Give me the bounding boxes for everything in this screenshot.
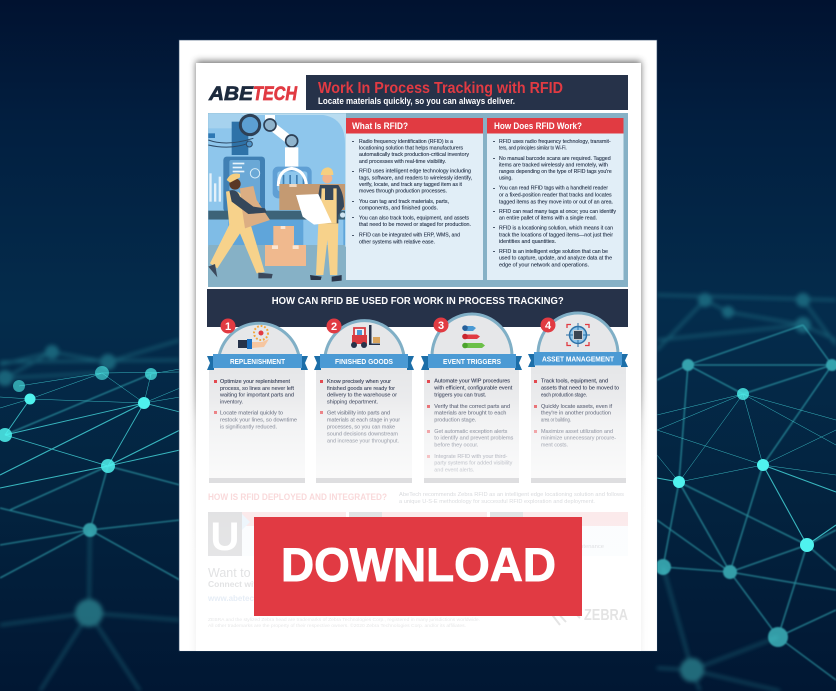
card 4 bullets: Quickly locate assets, even if — [541, 404, 612, 410]
network graphic: left side — [0, 340, 180, 691]
bullet list: what is RFID: automatically track production-critical inventory — [359, 152, 469, 158]
fade overlay — [180, 370, 657, 651]
card 1: replenishment — [207, 318, 308, 483]
card 1 bullets: is significantly reduced. — [220, 425, 277, 431]
illustration: factory workers and robot arm — [208, 113, 348, 288]
card 3 bullets: before they occur. — [434, 443, 479, 449]
card 3 bullets: Integrate RFID with your third- — [434, 454, 507, 460]
number badge 3: 3 — [438, 320, 444, 332]
call to action — [207, 566, 325, 603]
card 2 bullets: sound decisions downstream — [327, 431, 398, 437]
card 2 bullets: processes, so you can make — [327, 425, 395, 431]
bullet list: what is RFID: and processes with real-time visibility. — [359, 159, 446, 165]
bullet list: what is RFID: that need to be moved or staged for production. — [359, 222, 471, 228]
step S — [349, 512, 487, 556]
step U: U — [211, 515, 239, 559]
bullet list: how RFID works: RFID can read many tags at once; you can identify — [499, 209, 616, 215]
outer white card — [179, 40, 657, 651]
inner sheet shadow — [196, 61, 641, 661]
bullet list: how RFID works: ters, and principles similar to Wi-Fi. — [499, 145, 567, 151]
title banner: Work In Process Tracking with RFID — [318, 80, 563, 97]
download button — [254, 517, 582, 616]
card 2 bullets: Know precisely when your — [327, 379, 391, 385]
card 2: finished goods — [314, 318, 414, 483]
worker with blueprint — [296, 167, 344, 282]
ribbon: replenishment — [207, 354, 308, 370]
bullet list: what is RFID: RFID uses intelligent edge technology including — [359, 169, 471, 175]
bullet list: what is RFID: locationing solution that helps manufacturers — [359, 146, 463, 152]
card 2 bullets: delivery to the warehouse or — [327, 393, 397, 399]
call to action: Want to Learn More? — [208, 566, 325, 580]
card 4 bullets: area or building. — [541, 418, 571, 424]
card 2 bullets: materials at each stage in your — [327, 417, 400, 423]
card 3 bullets: with efficient, configurable event — [433, 386, 513, 392]
title banner — [306, 75, 628, 110]
step E — [490, 512, 628, 556]
legal text: ZEBRA and the stylized Zebra head are trademarks of Zebra Technologies Corp., registered in many jurisdictions worldwide. — [208, 617, 480, 623]
ribbon: asset management — [528, 352, 628, 367]
ribbon: asset management: ASSET MANAGEMENT — [542, 354, 615, 364]
section heading band — [207, 289, 628, 327]
legal text — [208, 617, 480, 629]
bullet list: how RFID works: track the locations of tagged items—not just their — [499, 232, 613, 238]
intro text: a unique U-S-E methodology for successful RFID exploration and deployment. — [399, 499, 595, 505]
panel: What Is RFID?: What Is RFID? — [352, 121, 408, 132]
number badge 2 — [326, 318, 342, 334]
bullet list: what is RFID: You can tag and track materials, parts, — [359, 199, 449, 205]
title banner: Locate materials quickly, so you can always deliver. — [318, 96, 515, 107]
icon: hand with gear — [238, 326, 269, 349]
number badge 2: 2 — [331, 321, 337, 333]
bullet list: how RFID works: used to capture, update, and analyze data at the — [499, 256, 612, 262]
network graphic: right side — [655, 294, 836, 691]
boxes — [265, 226, 306, 266]
ribbon: finished goods: FINISHED GOODS — [335, 357, 393, 366]
ribbon: replenishment: REPLENISHMENT — [230, 357, 286, 366]
bullet list: how RFID works: using. — [499, 176, 513, 182]
card 1 bullets: waiting for important parts and — [219, 393, 294, 399]
bullet list: how RFID works: identities and quantities. — [499, 239, 556, 245]
heading: how is RFID deployed: HOW IS RFID DEPLOYED AND INTEGRATED? — [208, 492, 387, 502]
bullet list: how RFID works: or a fixed-position reader that tracks and locates — [499, 193, 612, 199]
logo: AbeTech: TECH — [253, 83, 298, 105]
card 1 bullets: inventory. — [220, 400, 243, 406]
number badge 1: 1 — [225, 321, 231, 333]
card 1 bullets: Optimize your replenishment — [220, 379, 290, 385]
bullet list: how RFID works: items are tracked wirelessly and remotely, with — [499, 163, 608, 169]
deployment section — [207, 492, 628, 629]
bullet list: what is RFID: verify, locate, and track any tagged item as it — [359, 182, 462, 188]
bullet list: how RFID works: RFID uses radio frequency technology, transmit- — [499, 139, 611, 145]
bullet list: what is RFID: other systems with relative ease. — [359, 239, 435, 245]
icon: forklift — [351, 325, 380, 348]
card 4: asset management — [528, 313, 628, 483]
number badge 1 — [220, 318, 236, 334]
card 2 bullets: Get visibility into parts and — [327, 410, 390, 416]
Zebra logo: ZEBRA — [584, 607, 628, 624]
card 1 bullets — [214, 379, 297, 431]
step E: maintenance — [571, 544, 604, 550]
ribbon: event triggers — [421, 354, 522, 370]
icon: status pills — [462, 325, 485, 348]
card 2 bullets: shipping department. — [327, 400, 378, 406]
panel: How Does RFID Work?: How Does RFID Work? — [494, 121, 582, 132]
Zebra logo — [550, 607, 628, 625]
document preview card — [179, 40, 657, 661]
card 3 bullets: Verify that the correct parts and — [434, 404, 510, 410]
card 4 bullets: assets that need to be moved to — [541, 386, 619, 392]
intro text — [399, 492, 624, 505]
card 1 bullets: process, so lines are never left — [220, 386, 294, 392]
card 3 bullets: party systems for added visibility — [434, 461, 512, 467]
bullet list: how RFID works: edge of your network and operations. — [499, 263, 589, 269]
card 4 bullets: each production stage. — [541, 392, 587, 398]
bullet list: how RFID works: tagged items as they move into or out of an area. — [499, 199, 613, 205]
bullet list: what is RFID: components, and finished goods. — [359, 206, 438, 212]
intro text: AbeTech recommends Zebra RFID as an intelligent edge locationing solution and follows — [399, 492, 624, 498]
icon: target with chip — [566, 323, 590, 347]
card 3 bullets: materials are brought to each — [434, 411, 506, 417]
download button: DOWNLOAD — [281, 538, 556, 591]
bullet list: what is RFID: You can also track tools, equipment, and assets — [359, 215, 469, 221]
number badge 3 — [434, 318, 448, 332]
card 4 bullets: they're in another production — [541, 411, 611, 417]
card 3 bullets: and event alerts. — [434, 468, 475, 474]
card 2 bullets: and increase your throughput. — [327, 438, 399, 444]
bullet list: what is RFID — [352, 139, 472, 245]
ribbon: event triggers: EVENT TRIGGERS — [443, 357, 501, 366]
number badge 4 — [540, 318, 556, 332]
legal text: All other trademarks are the property of their respective owners. ©2020 Zebra Technologies Corp. and/or its affiliates. — [208, 622, 466, 629]
panel: What Is RFID? — [346, 118, 483, 280]
card 3 bullets: Automate your WIP procedures — [434, 379, 510, 385]
card 1 bullets: Locate material quickly to — [220, 410, 283, 416]
card 4 bullets — [534, 379, 619, 449]
logo: AbeTech — [208, 83, 298, 105]
card 3: event triggers — [421, 314, 522, 483]
card 3 bullets: to identify and prevent problems — [434, 436, 513, 442]
card 4 bullets: ment costs. — [541, 443, 568, 449]
card 3 bullets: Get automatic exception alerts — [434, 429, 507, 435]
card 4 bullets: Maximize asset utilization and — [541, 429, 613, 435]
card 1 bullets: restock your lines, so downtime — [220, 417, 297, 423]
card 3 bullets: production stage. — [434, 418, 477, 424]
section heading band: HOW CAN RFID BE USED FOR WORK IN PROCESS TRACKING? — [272, 295, 564, 307]
bullet list: how RFID works: RFID is a locationing solution, which means it can — [499, 225, 613, 231]
bullet list: how RFID works: RFID is an intelligent edge solution that can be — [499, 249, 608, 255]
bullet list: how RFID works: ranges depending on the type of RFID tags you're — [499, 169, 612, 175]
bullet list: what is RFID: moves through production processes. — [359, 189, 447, 195]
number badge 4: 4 — [545, 320, 552, 332]
card 3 bullets: triggers you can trust. — [434, 392, 487, 398]
panel: How Does RFID Work? — [487, 118, 624, 280]
bullet list: how RFID works — [493, 139, 616, 269]
ribbon: finished goods — [314, 354, 414, 370]
panel frame — [208, 113, 628, 287]
card 2 bullets — [320, 379, 400, 444]
bullet list: what is RFID: tags, software, and readers to wirelessly identify, — [359, 175, 472, 181]
bullet list: what is RFID: RFID can be integrated with ERP, WMS, and — [359, 233, 460, 239]
call to action: www.abetech.com — [207, 594, 278, 603]
bullet list: what is RFID: Radio frequency identification (RFID) is a — [359, 139, 454, 145]
logo: AbeTech: ABE — [208, 83, 254, 105]
card 4 bullets: minimize unnecessary procure- — [541, 436, 616, 442]
bullet list: how RFID works: an entire pallet of items with a single read. — [499, 216, 597, 222]
call to action: Connect with Us — [208, 579, 275, 589]
inner sheet — [196, 63, 641, 651]
worker carrying boxes — [208, 173, 273, 278]
card 4 bullets: Track tools, equipment, and — [541, 379, 608, 385]
step U — [208, 512, 346, 559]
card 2 bullets: finished goods are ready for — [327, 386, 395, 392]
bullet list: how RFID works: You can read RFID tags with a handheld reader — [499, 186, 608, 192]
bullet list: how RFID works: No manual barcode scans are required. Tagged — [499, 156, 611, 162]
card 3 bullets — [427, 379, 513, 474]
